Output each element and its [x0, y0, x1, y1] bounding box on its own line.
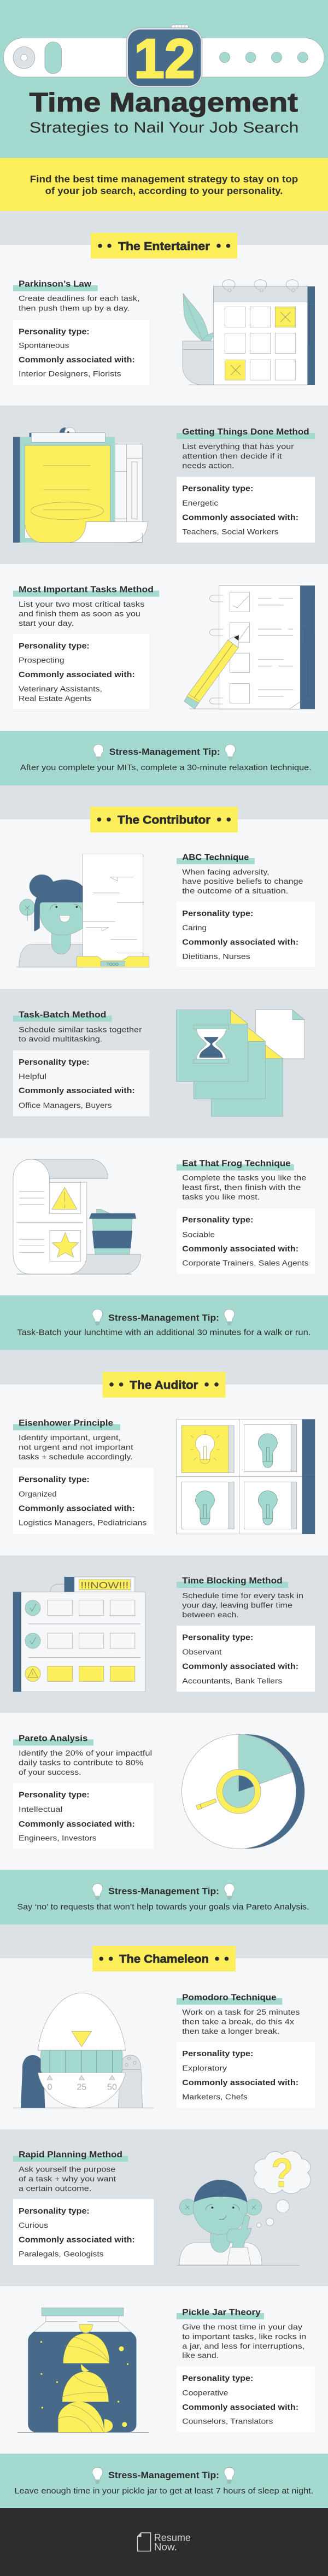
info card: Personality type: [19, 1058, 90, 1067]
info card [13, 1051, 149, 1116]
tip text: Say ‘no’ to requests that won’t help towards your goals via Pareto Analysis. [17, 1903, 309, 1912]
description: Create deadlines for each task, [19, 295, 139, 303]
description [19, 1434, 133, 1462]
panel: ABC Technique [16, 853, 315, 967]
description: then take a break, do this 4x [182, 2018, 294, 2027]
info card: Personality type: [182, 1216, 253, 1225]
info card: Organized [19, 1490, 57, 1499]
info card: Commonly associated with: [182, 938, 298, 947]
description: Complete the tasks you like the [182, 1174, 306, 1183]
heading: The Entertainer [91, 233, 237, 259]
description: the outcome of a situation. [182, 887, 288, 895]
description: start your day. [19, 619, 74, 628]
icon: watch [3, 25, 324, 90]
info card: Helpful [19, 1072, 46, 1081]
heading: Eisenhower Principle [19, 1419, 113, 1428]
heading: The Chameleon: The Chameleon [119, 1953, 209, 1965]
info card: Commonly associated with: [182, 2079, 298, 2087]
info card: Commonly associated with: [182, 513, 298, 522]
info card: Personality type: [19, 1476, 90, 1484]
info card: Commonly associated with: [19, 1820, 135, 1829]
NOW sign [79, 1580, 130, 1591]
description: tasks you like most. [182, 1193, 260, 1202]
tip heading: Stress-Management Tip: [108, 1886, 219, 1897]
description: of your success. [19, 1768, 81, 1777]
icon: bulb [92, 1309, 103, 1325]
info card: Commonly associated with: [182, 1245, 298, 1254]
description [182, 1592, 303, 1619]
description: between each. [182, 1611, 239, 1619]
heading: Pickle Jar Theory [182, 2308, 261, 2317]
to-do label: TODO [107, 961, 119, 966]
info card: Caring [182, 924, 207, 932]
info card: Dietitians, Nurses [182, 952, 250, 961]
description: daily tasks to contribute to 80% [19, 1759, 144, 1768]
info card: Personality type: [182, 484, 253, 493]
heading [13, 2150, 128, 2162]
description [19, 600, 144, 628]
info card: Prospecting [19, 656, 65, 665]
icon: plant and calendar [183, 280, 315, 385]
panel: Eisenhower Principle [13, 1419, 315, 1534]
icon: pickle jar with rocks [17, 2308, 149, 2432]
footer logo [138, 2532, 191, 2552]
description: to avoid multitasking. [19, 1035, 103, 1044]
description: have positive beliefs to change [182, 877, 303, 886]
heading [13, 1419, 120, 1430]
description: like sand. [182, 2351, 219, 2360]
info card: Personality type: [182, 1634, 253, 1642]
heading: Time Blocking Method [182, 1576, 283, 1586]
heading: Most Important Tasks Method [19, 585, 154, 595]
question mark: ? [271, 2150, 293, 2196]
info card [13, 1468, 154, 1534]
info card: Spontaneous [19, 341, 69, 350]
info card [13, 634, 149, 709]
panel: Most Important Tasks Method [13, 585, 315, 709]
icon: planner board [13, 1577, 145, 1692]
heading [13, 1010, 112, 1022]
description: needs action. [182, 461, 235, 470]
info card: Engineers, Investors [19, 1834, 96, 1842]
panel: stress tip 2 [17, 1309, 311, 1337]
description: of a task + why you want [19, 2175, 116, 2184]
icon: thinking person [177, 2150, 311, 2265]
timer numbers: 50 [107, 2082, 117, 2092]
icon: bulb [224, 1883, 235, 1899]
info card: Exploratory [182, 2064, 227, 2073]
icon: bulb [92, 2467, 103, 2483]
info card: Intellectual [19, 1805, 62, 1814]
footer logo: Now. [154, 2542, 177, 2552]
heading [13, 279, 98, 291]
heading: The Contributor: The Contributor [118, 814, 210, 826]
info card: Personality type: [182, 2050, 253, 2058]
info card: Personality type: [19, 1791, 90, 1800]
description: Identify important, urgent, [19, 1434, 121, 1442]
heading: The Entertainer: The Entertainer [118, 240, 210, 253]
panel: Pareto Analysis [13, 1734, 304, 1849]
info card: Personality type: [19, 642, 90, 650]
description [182, 2323, 306, 2360]
description: List everything that has your [182, 442, 294, 451]
info card [177, 477, 315, 543]
info card: Commonly associated with: [182, 1663, 298, 1671]
heading: The Contributor [90, 807, 238, 832]
info card: Marketers, Chefs [182, 2093, 248, 2102]
heading [177, 2308, 264, 2319]
tip text: Leave enough time in your pickle jar to get at least 7 hours of sleep at night. [14, 2486, 313, 2496]
icon: four-quadrant lightbulbs [177, 1419, 315, 1534]
tip heading: Stress-Management Tip: [108, 1312, 219, 1323]
heading: ABC Technique [182, 853, 249, 862]
description: Schedule time for every task in [182, 1592, 303, 1600]
info card [177, 902, 315, 967]
description: a jar, and less for interruptions, [182, 2342, 304, 2351]
info card: Commonly associated with: [182, 2403, 298, 2412]
icon: bulb [225, 744, 235, 760]
info card [13, 320, 149, 385]
heading: Task-Batch Method [19, 1010, 106, 1019]
info card [177, 1208, 315, 1274]
heading [177, 1993, 282, 2005]
description: Identify the 20% of your impactful [19, 1749, 152, 1758]
heading: The Auditor: The Auditor [130, 1379, 198, 1392]
icon: checklist and pencil [180, 585, 315, 709]
heading [177, 1159, 294, 1171]
description: Schedule similar tasks together [19, 1025, 142, 1034]
description [182, 2008, 300, 2036]
panel: Rapid Planning Method [13, 2150, 311, 2265]
info card: Sociable [182, 1230, 215, 1239]
description: tasks + schedule accordingly. [19, 1453, 133, 1462]
info card: Energetic [182, 499, 218, 508]
heading [13, 1734, 93, 1746]
description: and finish them as soon as you [19, 610, 140, 619]
heading: Pareto Analysis [19, 1734, 87, 1743]
info card: Commonly associated with: [19, 671, 135, 679]
panel: Time Blocking Method [13, 1576, 315, 1692]
info card: Commonly associated with: [19, 2235, 135, 2244]
description [19, 2165, 116, 2193]
heading [177, 853, 255, 864]
info card: Veterinary Assistants, [19, 685, 102, 694]
tip heading: Stress-Management Tip: [108, 2470, 219, 2480]
info card: Accountants, Bank Tellers [182, 1677, 282, 1686]
info card [177, 2367, 315, 2432]
panel: stress tip 1 [20, 744, 312, 772]
heading: Rapid Planning Method [19, 2150, 122, 2160]
description: then take a longer break. [182, 2027, 279, 2036]
panel: Task-Batch Method [13, 1010, 304, 1116]
panel: stress tip 3 [17, 1883, 309, 1912]
panel: Getting Things Done Method [13, 427, 315, 543]
icon: bulb [92, 1883, 103, 1899]
description [182, 1174, 306, 1202]
heading: The Auditor [103, 1372, 225, 1398]
description: When facing adversity, [182, 868, 269, 877]
heading [177, 427, 315, 439]
intro text [30, 173, 298, 196]
to-do label [101, 961, 125, 966]
tip text: After you complete your MITs, complete a 30-minute relaxation technique. [20, 763, 312, 772]
icon: bulb [224, 1309, 235, 1325]
heading: Eat That Frog Technique [182, 1159, 291, 1168]
info card: Observant [182, 1648, 221, 1657]
description [182, 868, 303, 895]
panel: header [3, 25, 324, 136]
icon: person with to-do paper [16, 854, 149, 967]
panel: stress tip 4 [14, 2467, 313, 2496]
tip text: Task-Batch your lunchtime with an additional 30 minutes for a walk or run. [17, 1328, 311, 1337]
description: your day, leaving buffer time [182, 1601, 292, 1610]
intro text: of your job search, according to your personality. [45, 185, 283, 196]
description: attention then decide if it [182, 452, 282, 461]
description [182, 442, 294, 470]
info card: Teachers, Social Workers [182, 528, 278, 537]
info card [13, 1783, 154, 1849]
heading: Parkinson’s Law [19, 279, 92, 289]
info card: Cooperative [182, 2389, 229, 2397]
info card: Commonly associated with: [19, 1505, 135, 1513]
chart: pie under magnifier [181, 1734, 304, 1849]
description: Ask yourself the purpose [19, 2165, 115, 2174]
icon: files with hourglass [177, 1010, 304, 1116]
info card: Logistics Managers, Pediatricians [19, 1519, 147, 1528]
info card: Office Managers, Buyers [19, 1101, 112, 1110]
info card: Personality type: [19, 2207, 90, 2216]
timer numbers [48, 2082, 117, 2092]
description: a certain outcome. [19, 2184, 91, 2193]
icon: clipboard notes [13, 427, 148, 543]
info card: Commonly associated with: [19, 356, 135, 365]
tip heading: Stress-Management Tip: [109, 747, 220, 757]
description: Give the most time in your day [182, 2323, 303, 2332]
number 12: 12 [134, 28, 195, 90]
footer logo: Resume [154, 2532, 191, 2543]
heading: Getting Things Done Method [182, 427, 309, 437]
heading [177, 1576, 288, 1588]
description: least first, then finish with the [182, 1183, 301, 1192]
info card: Paralegals, Geologists [19, 2250, 103, 2259]
heading: Pomodoro Technique [182, 1993, 277, 2002]
info card: Counselors, Translators [182, 2417, 273, 2426]
panel: Pomodoro Technique [13, 1993, 315, 2108]
info card: Personality type: [19, 327, 90, 336]
description [19, 1749, 152, 1777]
description [19, 1025, 142, 1044]
panel: Parkinson's Law [13, 279, 315, 385]
info card [177, 2042, 315, 2108]
heading: The Chameleon [92, 1946, 236, 1971]
panel: Pickle Jar Theory [17, 2308, 315, 2432]
info card: Personality type: [182, 909, 253, 918]
description: List your two most critical tasks [19, 600, 144, 609]
description [19, 295, 139, 313]
description: then push them up by a day. [19, 304, 130, 313]
info card: Curious [19, 2221, 48, 2230]
timer numbers: 25 [77, 2082, 86, 2092]
info card: Personality type: [182, 2374, 253, 2383]
icon: bulb [224, 2467, 235, 2483]
title: Time Management [30, 88, 298, 118]
info card [13, 2199, 154, 2265]
icon: egg timer and shakers [13, 1993, 154, 2108]
info card: Real Estate Agents [19, 695, 91, 703]
description: not urgent and not important [19, 1443, 133, 1452]
panel: Eat That Frog Technique [13, 1159, 315, 1274]
info card [177, 1626, 315, 1692]
timer numbers: 0 [48, 2082, 52, 2092]
NOW sign: !!!NOW!!! [80, 1580, 128, 1591]
description: to important tasks, like rocks in [182, 2333, 306, 2342]
icon: bulb [93, 744, 104, 760]
info card: Corporate Trainers, Sales Agents [182, 1259, 308, 1268]
info card: Interior Designers, Florists [19, 370, 121, 379]
icon: scroll and coffee cup [13, 1159, 141, 1274]
subtitle: Strategies to Nail Your Job Search [30, 119, 298, 136]
info card: Commonly associated with: [19, 1087, 135, 1095]
heading [13, 585, 159, 597]
description: Work on a task for 25 minutes [182, 2008, 300, 2017]
intro text: Find the best time management strategy to stay on top [30, 173, 298, 184]
